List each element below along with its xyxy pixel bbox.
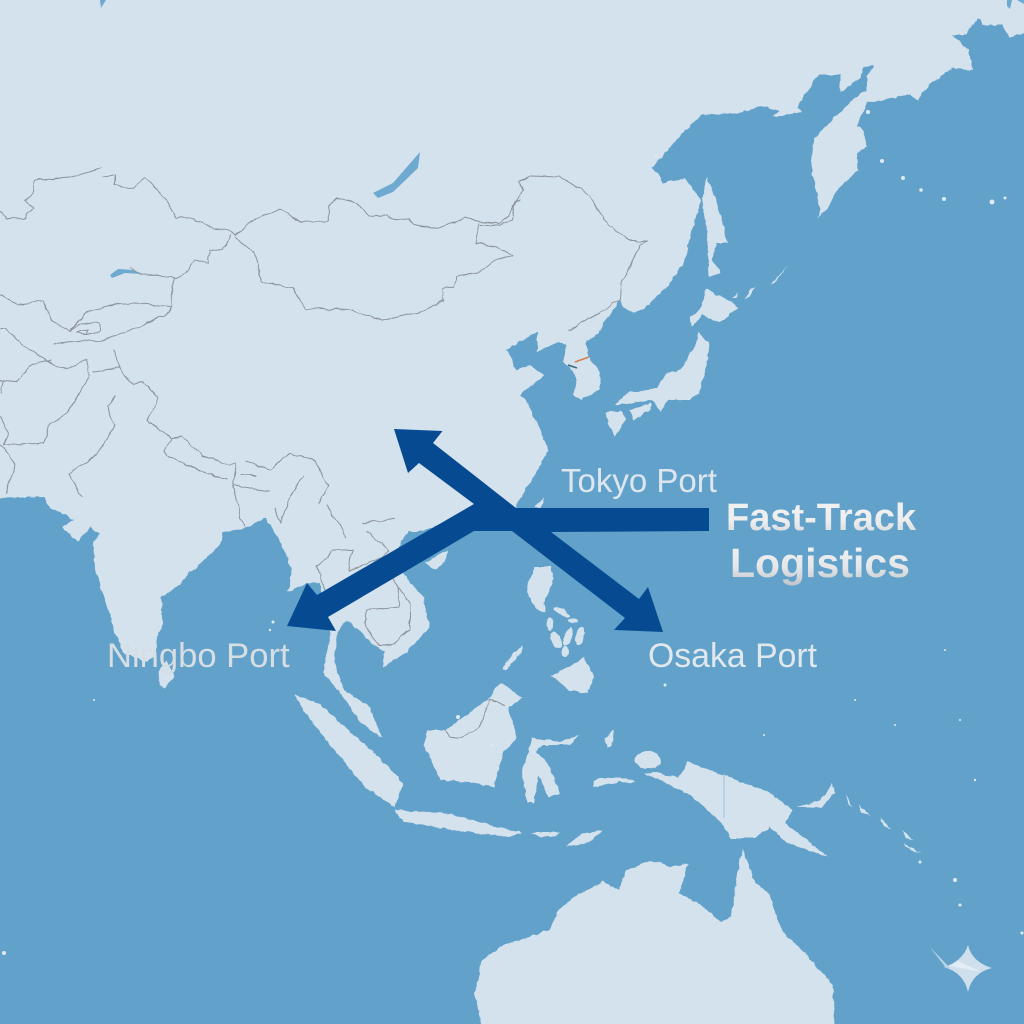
border: Korea [568,357,589,368]
border: North Korea and Russia [480,176,647,330]
land: Sakhalin [702,177,728,277]
land: New Guinea [645,762,828,857]
inlet: north-east corner [100,0,1024,9]
land: Eurasia mainland [0,0,1024,738]
route arrows [287,429,709,632]
national borders [0,168,647,737]
border: New Guinea [723,773,725,818]
land: Sumatra [294,695,403,807]
land: Timor [565,830,603,847]
land: Luzon [526,567,553,613]
land: Borneo [425,682,522,787]
land: New Britain [797,783,835,808]
label: Ningbo Port: Ningbo Port [107,637,290,675]
label: Tokyo Port: Tokyo Port [561,462,717,499]
lakes and top inlets [100,0,1024,278]
land: Visayas [547,605,586,657]
land: Mindanao [551,657,594,693]
title: Fast-Track Logistics: Logistics [730,540,910,586]
land: Kyushu [605,410,626,437]
label: Osaka Port: Osaka Port [648,637,818,675]
land: Hainan [425,550,448,570]
land: Kuril islands [733,265,788,300]
land: Sulawesi [522,735,579,803]
borders: south-east Asia [317,532,410,647]
icon: sparkle star [930,945,992,992]
title: Fast-Track Logistics: Fast-Track [726,497,917,539]
land: Sri Lanka [158,660,175,688]
land: Solomon islands [845,793,923,854]
lake Baikal [373,152,420,198]
land: Australia [475,848,835,1024]
border: Borneo [446,700,505,737]
land: Palawan [502,645,523,670]
land: Honshu [615,332,709,412]
land: Taiwan [534,498,544,508]
land: Seram and Moluccas [593,730,636,787]
land: Shikoku [629,403,652,420]
land: Java and Lesser Sunda [394,810,560,837]
borders: central Asia and China [0,168,520,538]
title: Fast-Track Logistics [726,497,917,586]
land: Hokkaido [690,289,738,327]
lake Balkhash [110,269,143,278]
